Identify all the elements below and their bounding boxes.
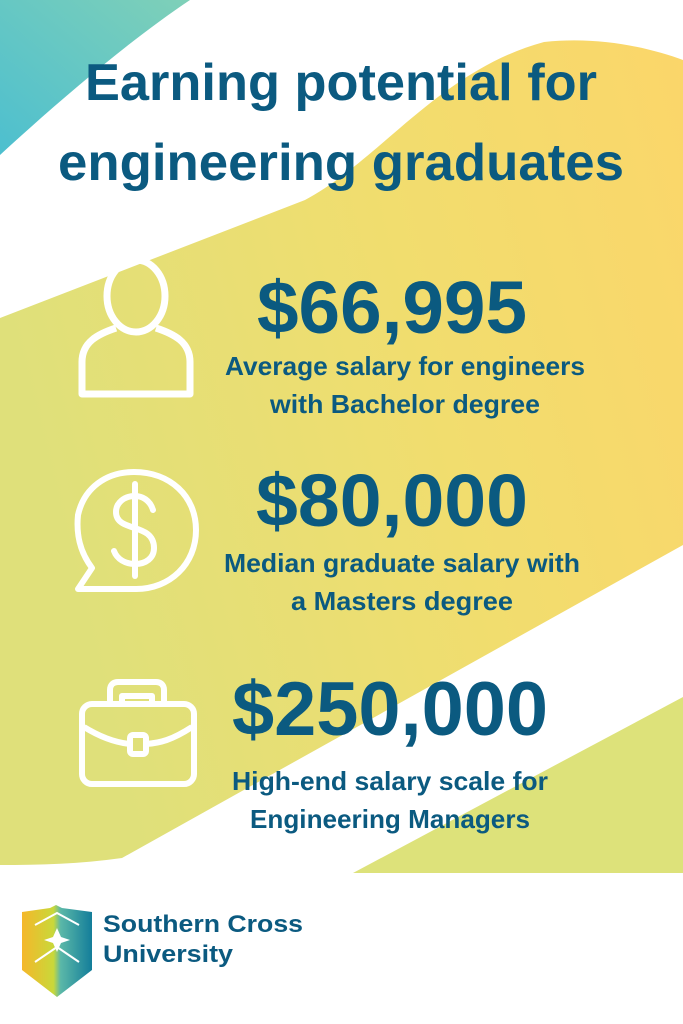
stat 3 [232,667,548,834]
stat 1 [225,266,585,419]
stat 1: $66,995 [257,266,527,349]
icon: dollar speech bubble [78,472,196,589]
logo shield [22,905,92,997]
stat 3: Engineering Managers [250,804,530,834]
stat 2 [224,459,580,616]
title: engineering graduates [58,134,624,192]
background: teal corner [0,0,190,155]
title: Earning potential for [85,54,597,112]
stat 1: Average salary for engineers [225,351,585,381]
icon: briefcase [82,682,194,784]
stat 2: Median graduate salary with [224,548,580,578]
logo: University [103,941,234,968]
stat 2: a Masters degree [291,586,513,616]
stat 1: with Bachelor degree [269,389,540,419]
title [58,54,624,192]
stat 2: $80,000 [256,459,528,542]
background: lime lower band [353,697,683,873]
stat 3: High-end salary scale for [232,766,548,796]
logo text: Southern Cross [103,911,303,938]
icon: person [82,260,190,394]
logo [22,905,303,997]
stat 3: $250,000 [232,667,548,752]
